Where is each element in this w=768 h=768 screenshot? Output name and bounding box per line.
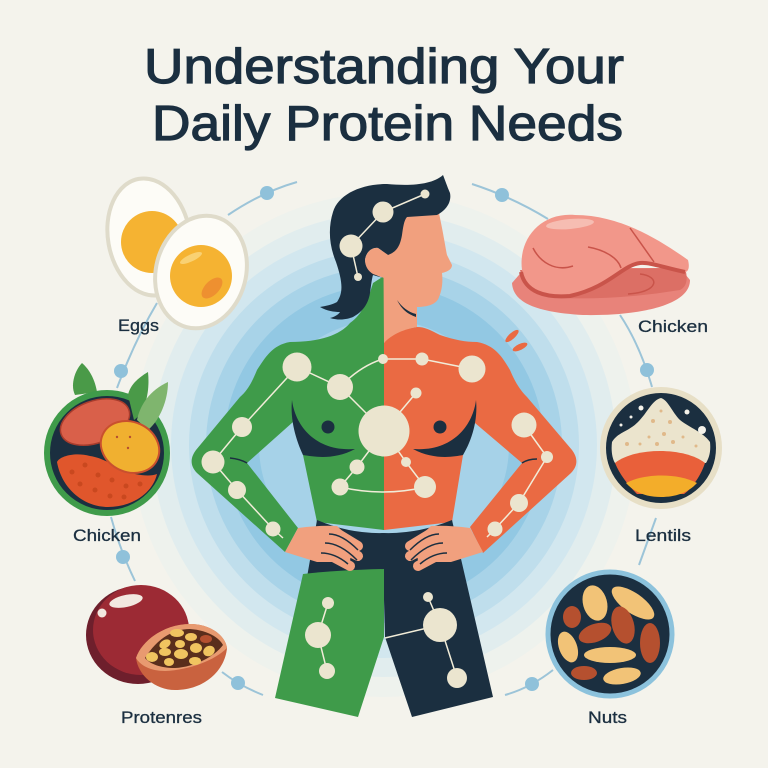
label: protenres: Protenres: [121, 708, 202, 727]
chest shadows and nipples: [292, 400, 355, 457]
shorts: [303, 520, 493, 717]
ear: [365, 248, 388, 278]
label: lentils: Lentils: [635, 526, 691, 545]
network lines: [213, 194, 547, 678]
label: eggs: Eggs: [118, 316, 159, 335]
connector arcs with dots: [111, 182, 656, 695]
red accent marks: [504, 328, 529, 353]
concentric blue background rings: [132, 193, 636, 697]
hair: [320, 175, 450, 320]
label: nuts: Nuts: [588, 708, 627, 727]
label: chicken left: Chicken: [73, 526, 141, 545]
title: Daily Protein Needs: [152, 97, 623, 151]
icon: eggs: [98, 172, 259, 339]
left hand: [285, 526, 358, 566]
right hand: [410, 526, 483, 566]
left green leg: [275, 569, 384, 717]
elbow creases: [230, 458, 537, 463]
icon: layered lentils bowl: [603, 390, 719, 506]
icon: bowl of lentils and potato: [47, 363, 168, 513]
title: [144, 40, 624, 151]
icon: nuts bowl: [548, 572, 672, 696]
orange half torso and right arm: [384, 327, 576, 553]
green half torso and left arm: [192, 276, 384, 552]
human figure: [192, 175, 576, 717]
label: chicken right: Chicken: [638, 317, 708, 336]
icon: chicken meat: [512, 215, 690, 315]
neck and face: [383, 200, 452, 343]
jaw shadow: [397, 300, 416, 317]
icon: red bean and seed fruit: [86, 585, 227, 690]
title: Understanding Your: [144, 40, 624, 94]
network nodes: [202, 190, 553, 688]
